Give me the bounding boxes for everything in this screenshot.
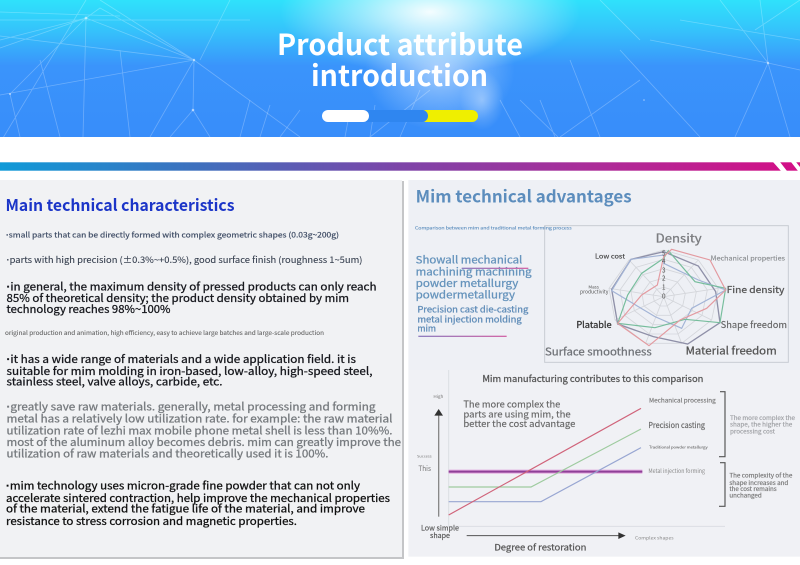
text: fine powder <box>6 478 390 529</box>
callout <box>463 398 575 430</box>
text: fine powder: accelerate sintered contraction, help improve the mechanical properties <box>6 490 390 506</box>
chart axes <box>449 370 725 526</box>
callout: parts are using mim, the <box>463 408 571 421</box>
line labels: Mechanical processing <box>649 396 717 405</box>
pill decoration <box>322 110 478 122</box>
text: materials: ·it has a wide range of materials and a wide application field. it is <box>6 351 356 367</box>
panel: mim technical advantages <box>408 180 800 370</box>
radar axis labels: Low cost <box>595 252 626 261</box>
note: higher cost <box>730 413 795 436</box>
panel: main technical characteristics <box>0 180 404 559</box>
line: traditional powder metallurgy <box>449 448 641 502</box>
title: introduction <box>311 53 488 95</box>
callout: The more complex the <box>463 398 560 411</box>
axis numbers: 2 <box>662 273 666 283</box>
y axis labels: Success <box>417 454 432 459</box>
line: metal injection forming <box>449 466 642 478</box>
radar axis labels: Mechanical properties <box>711 253 785 262</box>
line labels <box>648 396 717 475</box>
process list: Precision cast die-casting <box>417 304 528 316</box>
process list: machining machining <box>416 264 532 279</box>
x axis start label <box>421 524 459 541</box>
x axis end label: Complex shapes <box>635 535 674 542</box>
text: high precision: ·parts with high precision (±0.3%~+0.5%), good surface finish (roughness 1~5um) <box>6 253 363 266</box>
text: fine powder: ·mim technology uses micron-grade fine powder that can not only <box>6 478 360 494</box>
text: density: ·in general, the maximum density of pressed products can only reach <box>6 278 377 294</box>
x axis title: Degree of restoration <box>494 542 586 554</box>
heading: Main technical characteristics <box>6 192 235 216</box>
banner header <box>0 0 800 143</box>
note: unchanged cost: shape increases and <box>729 478 788 487</box>
callout: better the cost advantage <box>463 417 575 430</box>
axis numbers: 0 <box>662 291 666 301</box>
radar axis labels: Density <box>656 230 702 247</box>
chart title: Mim manufacturing contributes to this comparison <box>482 371 703 385</box>
process list: Showall mechanical <box>416 252 522 267</box>
comparison caption: Comparison between mim and traditional metal forming process <box>415 225 572 232</box>
text: production: original production and animation, high efficiency, easy to achieve large batches and large-scale production <box>5 328 324 337</box>
y axis labels: High <box>433 394 444 400</box>
note: higher cost: The more complex the <box>730 413 795 422</box>
line: precision casting <box>449 429 641 487</box>
axis numbers: 4 <box>662 256 666 266</box>
radar series: blue <box>612 255 726 328</box>
radar axis labels: productivity <box>580 289 609 296</box>
text: raw materials: most of the aluminum alloy becomes debris. mim can greatly improve the <box>6 434 401 450</box>
text: raw materials: metal has a relatively low utilization rate. for example: the raw material <box>6 411 392 427</box>
text: raw materials: utilization rate of lezhi max mobile phone metal shell is less than 10%%. <box>6 423 392 439</box>
radar axis labels: Material freedom <box>686 344 777 359</box>
radar axis labels: Surface smoothness <box>545 345 652 360</box>
text: fine powder: of the material, extend the fatigue life of the material, and improve <box>6 501 365 517</box>
heading: Mim technical advantages <box>416 184 632 208</box>
note: unchanged cost: unchanged <box>729 491 762 500</box>
bracket: higher cost <box>719 392 725 457</box>
text: materials: stainless steel, valve alloys, carbide, etc. <box>6 374 222 390</box>
text: fine powder: resistance to stress corrosion and magnetic properties. <box>6 513 297 529</box>
panel: cost comparison chart <box>408 370 800 557</box>
axis numbers: 1 <box>662 281 666 291</box>
note: higher cost: processing cost <box>730 427 776 436</box>
x axis arrow <box>467 532 626 539</box>
note: unchanged cost: The complexity of the <box>729 471 792 480</box>
axis numbers: 5 <box>662 247 666 257</box>
text: small parts: ·small parts that can be directly formed with complex geometric shapes (0.03g~200g) <box>6 230 339 240</box>
title <box>277 22 523 95</box>
radar series: green <box>618 251 726 328</box>
bracket: unchanged cost <box>719 463 725 506</box>
x axis start label: shape <box>430 531 450 541</box>
radar axis labels: Shape freedom <box>721 317 787 331</box>
process list: powdermetallurgy <box>416 287 516 302</box>
line: mechanical processing <box>449 408 641 515</box>
y axis arrow <box>434 409 443 517</box>
text: raw materials: utilization of raw materials and theoretically used it is 100%. <box>6 446 328 462</box>
text: materials <box>6 351 372 390</box>
process list: mim <box>417 323 436 335</box>
y axis labels: This <box>418 463 431 474</box>
note: unchanged cost <box>729 471 792 500</box>
radar chart <box>545 226 788 362</box>
axis numbers <box>662 247 666 301</box>
text: raw materials: ·greatly save raw materials. generally, metal processing and forming <box>6 399 376 415</box>
radar series: red <box>618 249 726 346</box>
process list: metal injection molding <box>417 314 522 326</box>
x axis start label: Low simple <box>421 524 459 534</box>
note: higher cost: shape, the higher the <box>730 420 792 429</box>
text: raw materials <box>6 399 401 462</box>
note: unchanged cost: the cost remains <box>729 484 777 493</box>
axis numbers: 3 <box>662 264 666 274</box>
radar axis labels <box>545 230 787 360</box>
process list <box>416 252 532 337</box>
process list: powder metallurgy <box>416 275 519 290</box>
radar axis labels: Mass <box>588 284 599 290</box>
text: density <box>6 278 377 317</box>
radar axis labels: Fine density <box>727 282 784 296</box>
text: density: technology reaches 98%~100% <box>6 301 170 317</box>
gradient band <box>0 162 800 171</box>
line labels: Precision casting <box>648 420 706 431</box>
line labels: Traditional powder metallurgy <box>649 446 708 451</box>
text: density: 85% of theoretical density; the product density obtained by mim <box>6 290 349 306</box>
radar series: purple <box>612 252 720 344</box>
line labels: Metal injection forming <box>648 466 706 475</box>
title: Product attribute <box>277 22 523 64</box>
text: materials: suitable for mim molding in iron-based, low-alloy, high-speed steel, <box>6 363 372 379</box>
radar axis labels: Platable <box>576 318 612 331</box>
y axis labels <box>417 394 444 474</box>
